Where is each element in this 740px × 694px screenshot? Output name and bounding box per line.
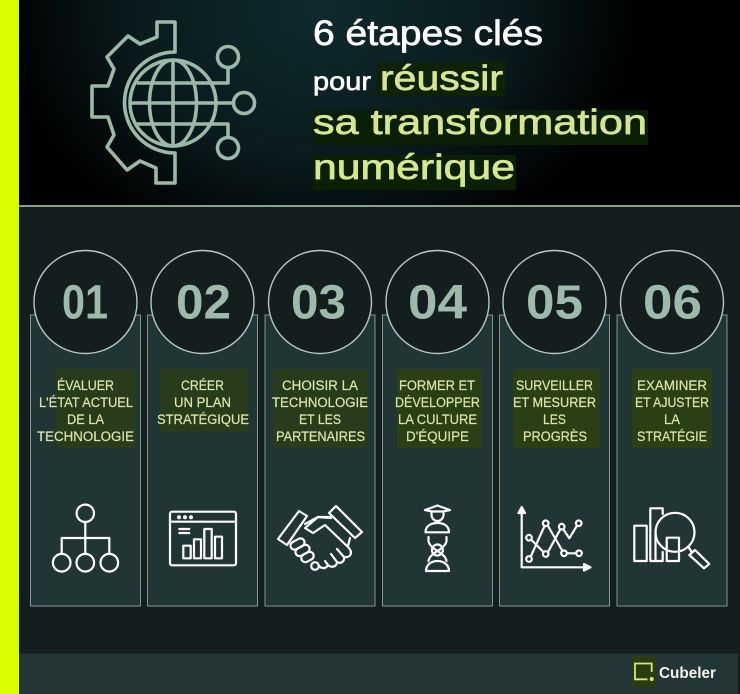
title: 6 étapes clés bbox=[313, 14, 543, 53]
panel: step 3: 03 bbox=[291, 276, 346, 330]
panel: step 6 bbox=[617, 250, 727, 606]
logo: Cubeler bbox=[632, 656, 716, 687]
panel: step 3: ET LES bbox=[299, 412, 341, 427]
title: numérique bbox=[313, 148, 515, 187]
panel: step 3: TECHNOLOGIE bbox=[272, 395, 368, 410]
icon: line chart bbox=[518, 507, 590, 570]
panel: step 4: FORMER ET bbox=[399, 378, 475, 393]
panel: step 5: SURVEILLER bbox=[516, 378, 593, 393]
icon: gear with globe bbox=[92, 22, 254, 183]
panel: step 1: L'ÉTAT ACTUEL bbox=[39, 395, 133, 410]
footer band bbox=[19, 654, 738, 694]
panel: step 5: PROGRÈS bbox=[523, 429, 587, 444]
panel: step 1: ÉVALUER bbox=[57, 378, 114, 393]
panel: step 2: UN PLAN bbox=[174, 395, 231, 410]
panel: step 1: DE LA bbox=[67, 412, 104, 427]
panel: step 4: LA CULTURE bbox=[398, 412, 477, 427]
title bbox=[313, 14, 648, 190]
panel: step 5 bbox=[500, 250, 610, 606]
panel: step 4: 04 bbox=[408, 276, 467, 330]
panel: step 6: LA bbox=[664, 412, 680, 427]
icon: org chart bbox=[53, 505, 118, 572]
panel: step 1: 01 bbox=[62, 276, 108, 330]
panel: step 6: EXAMINER bbox=[637, 378, 707, 393]
panel: step 5: LES bbox=[543, 412, 566, 427]
title: pour bbox=[313, 66, 371, 96]
panel: step 4 bbox=[382, 250, 492, 606]
panel: step 6: ET AJUSTER bbox=[635, 395, 709, 410]
panel: step 6: 06 bbox=[643, 276, 702, 330]
panel: step 6: STRATÉGIE bbox=[637, 429, 707, 444]
panel: step 4: DÉVELOPPER bbox=[395, 395, 480, 410]
left accent bar bbox=[0, 0, 19, 694]
icon: magnified bar chart bbox=[634, 508, 709, 568]
panel: step 4: D'ÉQUIPE bbox=[406, 429, 469, 444]
panel: step 2: 02 bbox=[176, 276, 231, 330]
icon: people and link bbox=[425, 506, 450, 571]
panel: step 5: ET MESURER bbox=[513, 395, 596, 410]
panel: step 5: 05 bbox=[526, 276, 583, 330]
panel: step 1 bbox=[30, 250, 140, 606]
title: réussir bbox=[380, 59, 503, 98]
header background bbox=[19, 0, 740, 205]
panel: step 3: PARTENAIRES bbox=[276, 429, 365, 444]
panel: step 3 bbox=[265, 250, 375, 606]
title: sa transformation bbox=[313, 103, 647, 142]
icon: handshake bbox=[278, 506, 362, 570]
panel: step 2: CRÉER bbox=[181, 378, 224, 393]
panel: step 2 bbox=[148, 250, 258, 606]
logo: Cubeler: Cubeler bbox=[659, 665, 716, 682]
panel: step 2: STRATÉGIQUE bbox=[157, 412, 249, 427]
panel: step 3: CHOISIR LA bbox=[282, 378, 358, 393]
panel: step 1: TECHNOLOGIE bbox=[37, 429, 134, 444]
icon: dashboard window bbox=[170, 512, 236, 565]
